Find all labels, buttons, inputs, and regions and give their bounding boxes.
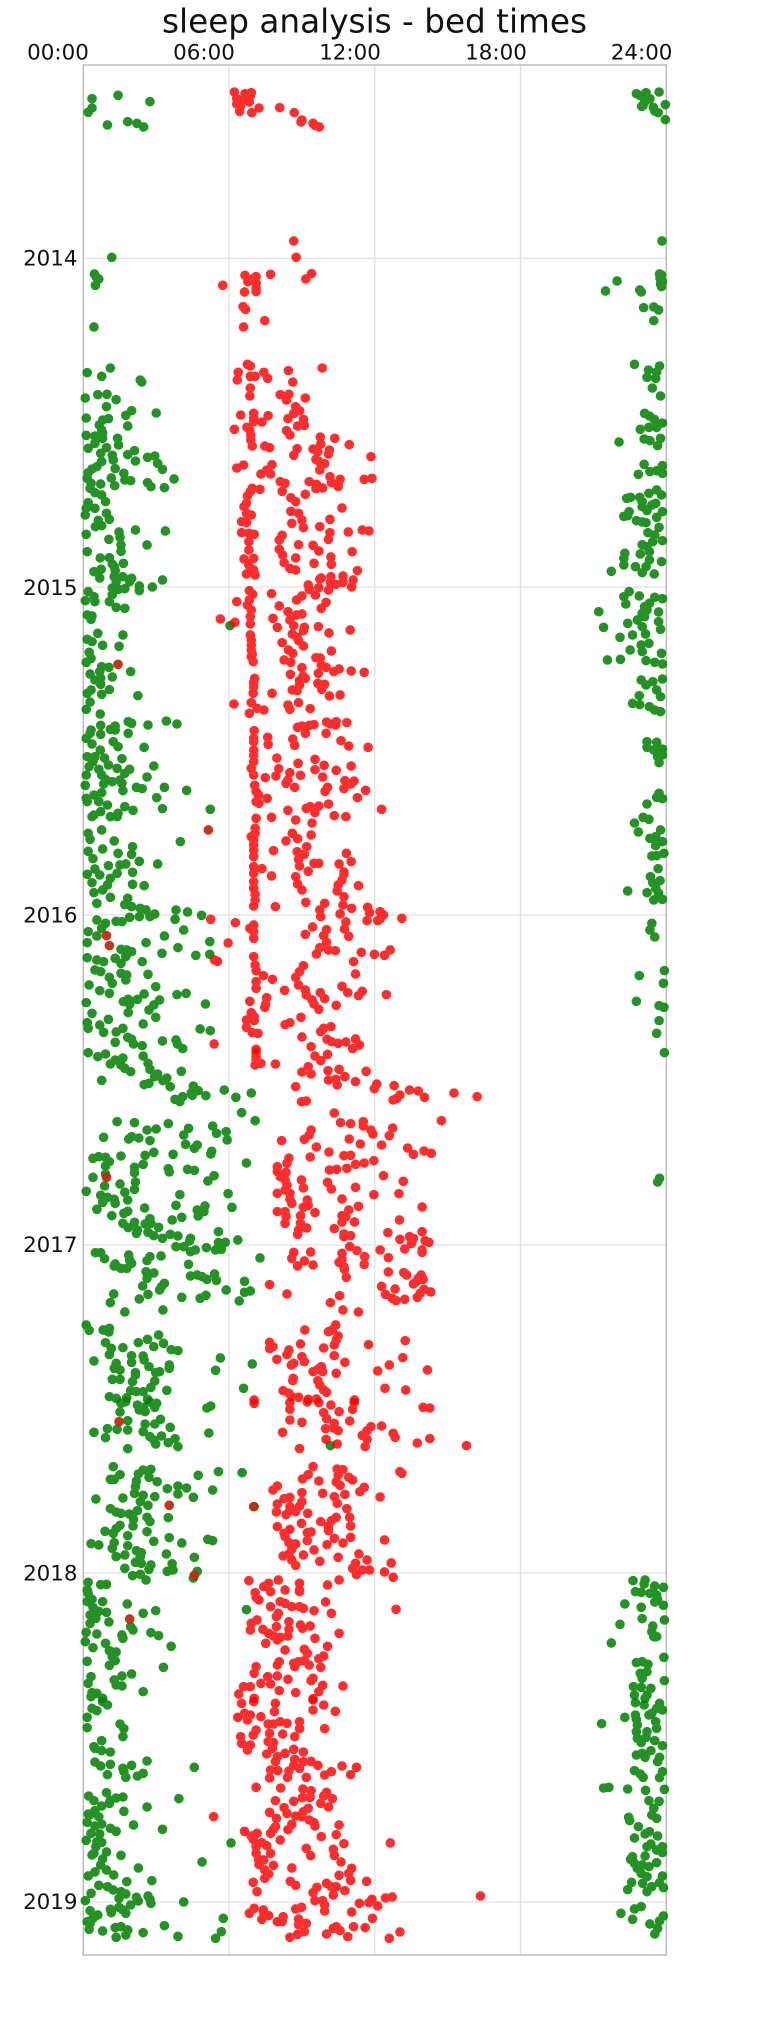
y axis year labels: [23, 247, 78, 1915]
title: sleep analysis - bed times: [162, 2, 587, 40]
x axis hour labels: 18:00: [465, 40, 527, 65]
y axis year labels: 2019: [23, 1890, 78, 1915]
x axis hour labels: 24:00: [611, 40, 672, 65]
x axis hour labels: 00:00: [27, 40, 89, 65]
red scatter dots: time in bed: [211, 92, 481, 1938]
x axis hour labels: 06:00: [173, 40, 235, 65]
y axis year labels: 2017: [23, 1233, 78, 1258]
dark red dots: red over green overlaps: [106, 664, 254, 1619]
y axis year labels: 2018: [23, 1562, 78, 1587]
plot frame: [83, 65, 666, 1955]
x axis hour labels: 12:00: [319, 40, 381, 65]
y axis year labels: 2016: [23, 904, 78, 929]
y axis year labels: 2014: [23, 247, 78, 272]
y axis year labels: 2015: [23, 576, 78, 601]
green scatter dots: time asleep before bed: [85, 92, 665, 1938]
x axis hour labels: [27, 40, 672, 65]
